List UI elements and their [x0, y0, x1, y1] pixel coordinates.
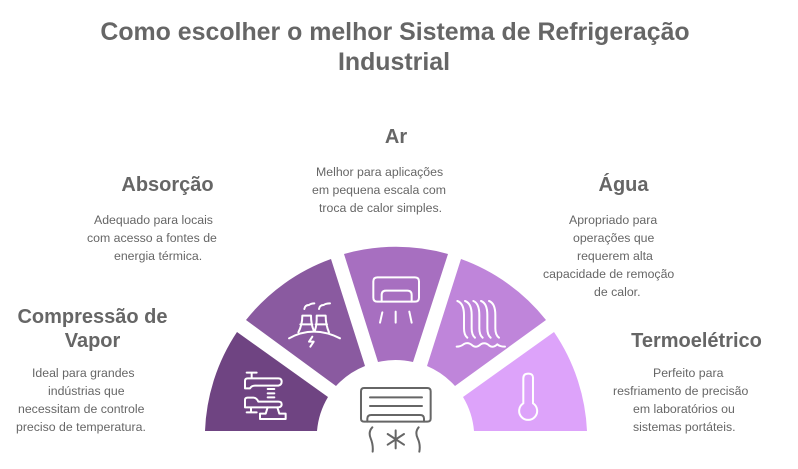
text: termoelétrico description: Perfeito para	[653, 366, 724, 380]
title	[100, 18, 690, 76]
text: absorção description	[87, 213, 217, 263]
text: água description: operações que	[573, 231, 655, 245]
title: Como escolher o melhor Sistema de Refrigeração	[100, 18, 690, 46]
text: termoelétrico description: sistemas portáteis.	[633, 420, 736, 434]
text: ar description: em pequena escala com	[312, 183, 446, 197]
text: água description: Apropriado para	[569, 213, 657, 227]
label: termoelétrico: Termoelétrico	[631, 330, 762, 352]
text: absorção description: energia térmica.	[114, 249, 202, 263]
text: compressão description: preciso de temperatura.	[16, 420, 146, 434]
label: absorção	[87, 174, 217, 263]
text: água description	[543, 213, 674, 299]
text: compressão description: indústrias que	[48, 384, 125, 398]
text: água description: de calor.	[594, 285, 640, 299]
text: compressão description: necessitam de controle	[18, 402, 145, 416]
icon: water waves	[457, 301, 505, 347]
text: termoelétrico description: em laboratórios ou	[633, 402, 735, 416]
text: termoelétrico description	[613, 366, 748, 434]
label: compressão de vapor: Compressão de	[17, 306, 168, 328]
label: termoelétrico	[613, 330, 762, 434]
label: ar: Ar	[385, 126, 407, 148]
label: compressão de vapor	[16, 306, 168, 434]
text: ar description	[312, 165, 446, 215]
icon: thermometer	[519, 374, 537, 420]
icon: air conditioner	[373, 277, 419, 323]
label: água: Água	[598, 173, 649, 196]
text: ar description: Melhor para aplicações	[316, 165, 443, 179]
panel: ar segment	[344, 247, 448, 362]
title: Industrial	[338, 48, 450, 76]
panel: termoelétrico segment	[463, 332, 587, 431]
label: ar	[312, 126, 446, 215]
panel: água segment	[427, 259, 546, 386]
label: água	[543, 173, 674, 299]
icon: central air conditioner with cold symbol	[361, 388, 431, 452]
text: ar description: troca de calor simples.	[319, 201, 442, 215]
panel: compressão de vapor segment	[205, 332, 328, 431]
icon: pipes and valve	[245, 373, 286, 419]
text: água description: requerem alta	[577, 249, 653, 263]
text: absorção description: Adequado para locais	[94, 213, 213, 227]
label: absorção: Absorção	[121, 174, 214, 196]
text: absorção description: com acesso a fontes de	[87, 231, 217, 245]
text: termoelétrico description: resfriamento de precisão	[613, 384, 748, 398]
text: compressão description: Ideal para grandes	[32, 366, 135, 380]
text: compressão description	[16, 366, 146, 434]
text: água description: capacidade de remoção	[543, 267, 674, 281]
icon: power plant	[289, 303, 340, 347]
label: compressão de vapor: Vapor	[65, 330, 121, 352]
panel: absorção segment	[246, 259, 365, 386]
